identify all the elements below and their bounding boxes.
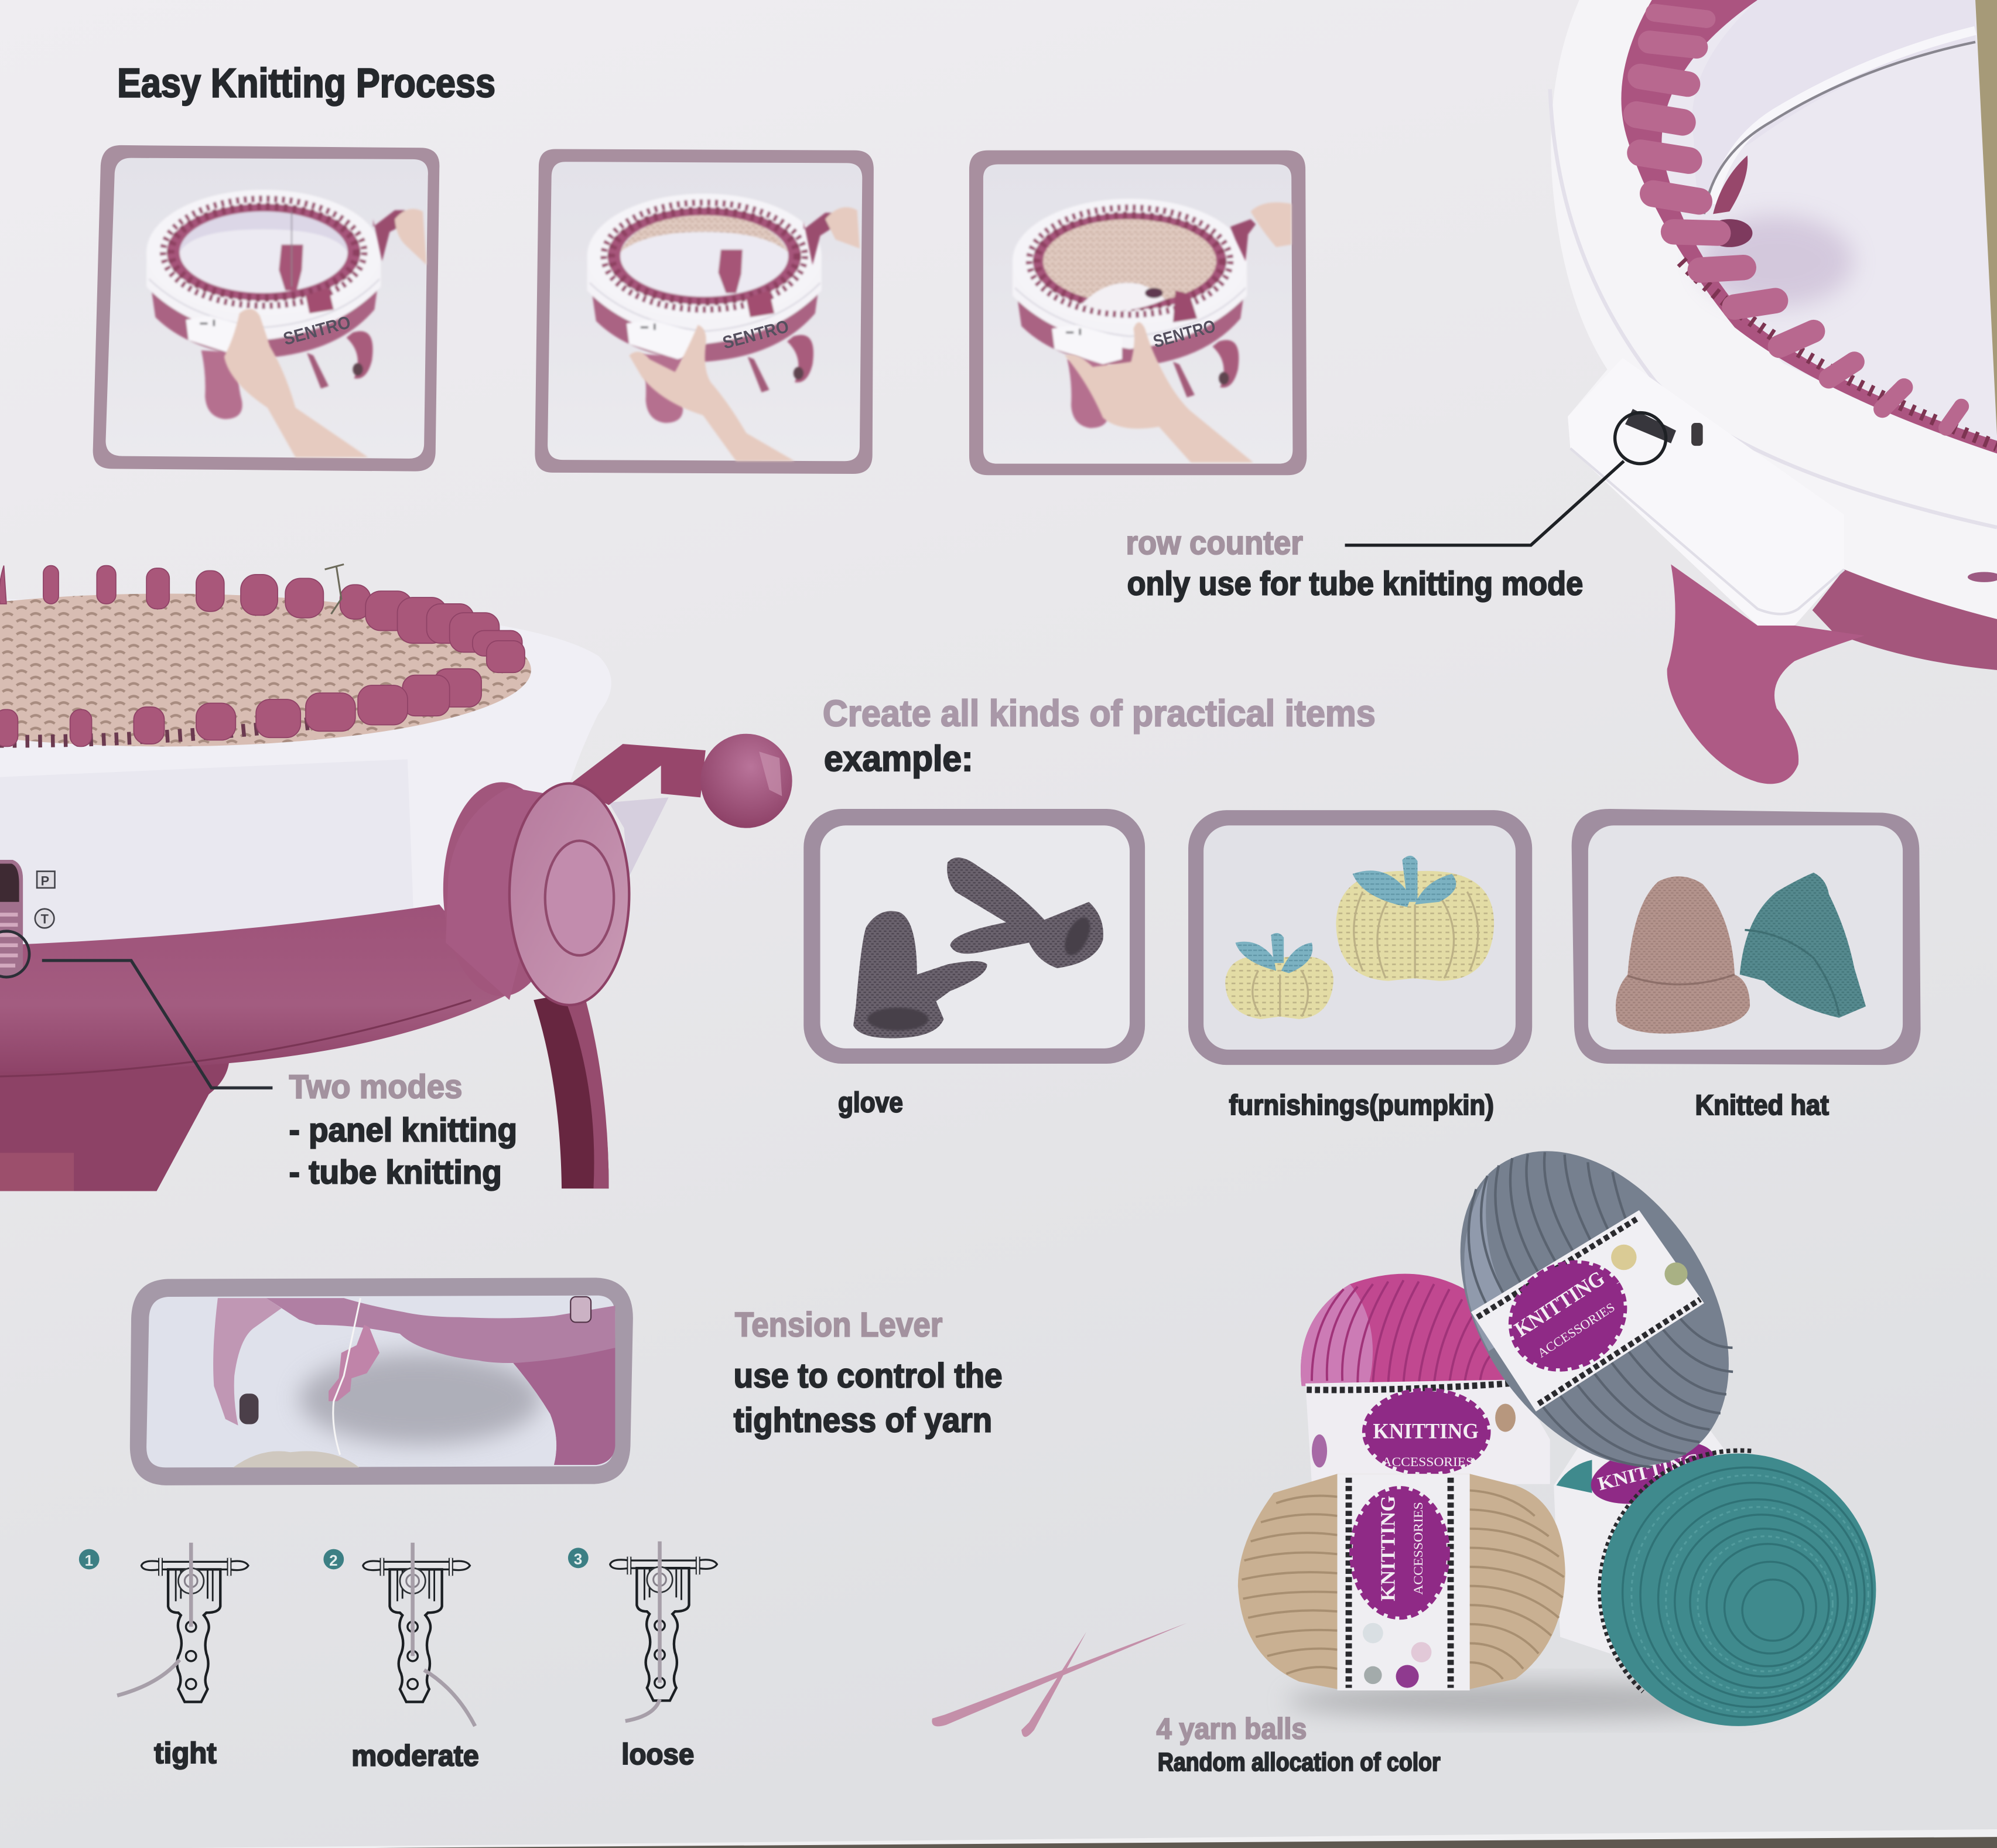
yarn thread	[333, 1298, 360, 1455]
step 1 brand text: SENTRO	[281, 312, 353, 349]
panel: glove	[803, 809, 1145, 1064]
diagram: loose	[568, 1542, 717, 1721]
pink hat	[1616, 876, 1750, 1034]
tension photo background	[146, 1296, 615, 1467]
panel: pumpkin	[1188, 810, 1532, 1065]
left glove	[853, 911, 987, 1038]
pink band	[0, 904, 509, 1072]
large pumpkin leaves	[1353, 856, 1456, 907]
counter pin	[1691, 423, 1703, 446]
teal yarn ball	[1601, 1453, 1876, 1726]
back pegs	[0, 566, 525, 672]
ring groove	[1550, 89, 1997, 527]
callout text: only use for tube knitting mode	[1127, 565, 1583, 602]
panel: step 1	[93, 145, 439, 472]
teal ball label: KNITTING	[1596, 1449, 1702, 1495]
teal hat brim	[1745, 930, 1839, 1015]
hat frame	[1572, 809, 1921, 1065]
teal hat	[1740, 873, 1866, 1018]
crank hub	[545, 841, 614, 955]
pink lower rim	[1813, 569, 1997, 670]
number 3: 3	[574, 1550, 582, 1568]
callout leader line	[1345, 461, 1624, 545]
right glove opening	[1059, 914, 1095, 959]
box edge: bottom	[153, 1829, 1997, 1848]
lever icon	[141, 1558, 248, 1702]
grey ball label: ACCESSORIES	[1535, 1300, 1618, 1361]
label: loose: loose	[621, 1738, 694, 1771]
crank arm lower	[609, 797, 669, 879]
loom wheel	[240, 1393, 258, 1424]
yarn path	[625, 1542, 660, 1721]
step 1 hands	[224, 209, 427, 457]
tension frame	[130, 1277, 633, 1485]
panel: step 2	[535, 149, 874, 474]
heading: tension lever: Tension Lever	[735, 1306, 942, 1344]
loom leg	[1667, 564, 1865, 784]
step 2 photo background	[548, 162, 862, 461]
tension lever	[329, 1325, 379, 1401]
peg teeth	[0, 721, 331, 742]
back leg	[1713, 155, 1748, 214]
small pumpkin	[1225, 956, 1333, 1019]
mode switch	[0, 860, 23, 978]
knob highlight	[759, 752, 782, 796]
diagram: tight	[79, 1543, 248, 1702]
label: pumpkin: furnishings(pumpkin)	[1229, 1090, 1494, 1121]
callout heading: Two modes	[289, 1068, 462, 1105]
step 1 loom	[146, 190, 381, 419]
tan ball label: ACCESSORIES	[1411, 1502, 1425, 1595]
tube mode icon: T	[41, 912, 49, 927]
panel: tension lever photo	[130, 1277, 633, 1485]
tension text: tightness of yarn	[734, 1401, 992, 1439]
tan yarn ball	[1238, 1474, 1565, 1689]
magenta yarn ball	[1301, 1274, 1518, 1386]
number 2: 2	[329, 1552, 338, 1569]
grey ball label: KNITTING	[1510, 1266, 1609, 1341]
lever icon	[610, 1557, 717, 1700]
hat photo background	[1588, 825, 1903, 1050]
peg teeth	[1681, 261, 1997, 446]
loom lower right	[513, 1348, 615, 1465]
mode slot	[570, 1297, 591, 1322]
panel mode icon	[37, 872, 55, 888]
icon: knitting needles	[932, 1623, 1187, 1737]
interior shadow	[1700, 216, 1853, 307]
panel mode icon: P	[41, 873, 49, 888]
knitted panel	[0, 593, 531, 746]
illustration: close-up loom top right	[1550, 0, 1997, 784]
number 1	[79, 1549, 100, 1569]
left glove opening	[867, 1007, 928, 1030]
magenta ball label: ACCESSORIES	[1382, 1455, 1473, 1469]
grey ball label	[1471, 1210, 1704, 1412]
label: moderate: moderate	[351, 1739, 479, 1772]
mode 1: - panel knitting	[289, 1112, 517, 1149]
floor shadow	[299, 1353, 541, 1444]
stray thread	[325, 564, 344, 614]
tan ball label	[1337, 1474, 1470, 1690]
heading: example: example:	[824, 739, 973, 778]
floor shadow	[1286, 1683, 1770, 1719]
glove photo background	[820, 825, 1130, 1048]
peg row	[1637, 13, 1961, 428]
inner band highlight	[1713, 30, 1975, 204]
crank knob	[700, 734, 792, 828]
loom interior	[1621, 0, 1997, 453]
callout: row counter	[1126, 413, 1666, 602]
illustration: large loom with crank	[0, 564, 792, 1191]
front pegs	[0, 669, 481, 746]
crank arm	[569, 744, 706, 805]
number 2	[323, 1549, 344, 1569]
step 2 hands	[629, 207, 860, 461]
loom leg right	[534, 991, 609, 1188]
diagram: moderate	[323, 1543, 475, 1726]
illustration: yarn balls	[1238, 1102, 1876, 1726]
callout heading: row counter	[1126, 524, 1303, 561]
small pumpkin leaves	[1236, 933, 1312, 973]
counter box	[1568, 358, 1844, 626]
teal ball label	[1554, 1426, 1783, 1692]
inner white band	[1692, 0, 1975, 217]
pink peg bed	[1621, 0, 1997, 453]
rim mark	[1968, 572, 1997, 582]
panel: step 3	[969, 151, 1307, 475]
right glove	[947, 858, 1103, 968]
lever icon	[363, 1558, 470, 1702]
loom body	[266, 1298, 615, 1465]
title: Easy Knitting Process	[117, 60, 495, 105]
yarn path	[413, 1543, 475, 1726]
mode 2: - tube knitting	[289, 1153, 502, 1190]
label: yarn balls: 4 yarn balls	[1157, 1713, 1307, 1745]
number 1: 1	[85, 1552, 93, 1569]
tan ball label: KNITTING	[1376, 1495, 1399, 1601]
step 2 frame	[535, 149, 874, 474]
label: knitted hat: Knitted hat	[1695, 1090, 1829, 1121]
callout leader line	[42, 961, 272, 1088]
row counter window	[1625, 409, 1676, 443]
step 2 brand text: SENTRO	[720, 316, 791, 353]
step 3 hands	[1065, 202, 1291, 462]
tube mode icon	[35, 909, 54, 928]
callout circle	[1615, 413, 1666, 464]
tension text: use to control the	[734, 1357, 1003, 1395]
magenta ball label	[1305, 1379, 1550, 1484]
callout: two modes	[0, 931, 517, 1190]
pumpkin photo background	[1203, 825, 1516, 1050]
grey yarn ball	[1405, 1102, 1784, 1515]
step 3 photo background	[983, 165, 1292, 464]
white loom ring	[1551, 0, 1997, 626]
label: glove: glove	[838, 1088, 903, 1119]
yarn path	[117, 1543, 191, 1696]
magenta ball label: KNITTING	[1373, 1419, 1479, 1443]
large pumpkin	[1336, 871, 1494, 981]
inner band shadow line	[1704, 42, 1975, 214]
step 1 photo background	[106, 158, 428, 459]
step 2 loom	[587, 194, 822, 423]
panel: knitted hat	[1572, 809, 1921, 1065]
step 3 frame	[969, 151, 1307, 475]
callout circle	[0, 931, 29, 977]
label: tight: tight	[154, 1737, 217, 1770]
yarn ball	[233, 1451, 359, 1467]
number 3	[568, 1548, 589, 1568]
lower pink base	[0, 1051, 230, 1191]
glove frame	[803, 809, 1145, 1064]
crank face	[509, 784, 629, 1005]
loom left leg	[213, 1298, 282, 1426]
step 3 brand text: SENTRO	[1151, 316, 1218, 351]
box edge: top right	[1975, 0, 1997, 436]
step 1 frame	[93, 145, 439, 472]
tension text	[734, 1357, 1003, 1439]
crank housing	[443, 782, 560, 996]
pink hat brim	[1627, 975, 1735, 985]
base sticker	[0, 1153, 74, 1191]
loom white body	[0, 599, 611, 945]
label: random colour: Random allocation of color	[1158, 1748, 1441, 1777]
step 3 loom	[1013, 199, 1247, 428]
heading: practical items: Create all kinds of practical items	[823, 694, 1376, 735]
pumpkin frame	[1188, 810, 1532, 1065]
